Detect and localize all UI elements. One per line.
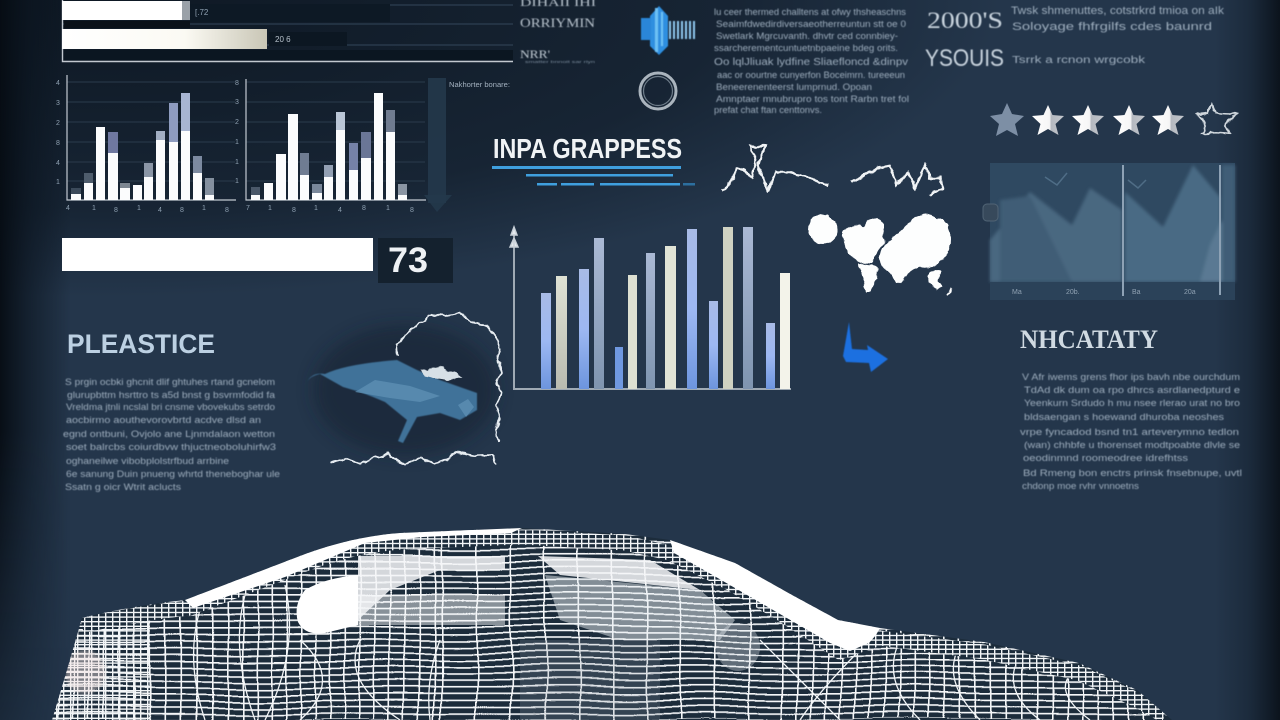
bar chart right: 3 (235, 99, 239, 106)
text block left: egnd ontbuni, Ovjolo ane Ljnmdalaon wetton (63, 429, 275, 439)
text block left: soet balrcbs coiurdbvw thjuctneoboluhirfw3 (66, 442, 276, 452)
heading: right: NHCATATY (1020, 325, 1158, 354)
area chart panel: 20a (1184, 289, 1196, 296)
side window rear (358, 556, 505, 625)
bar chart right: 8 (362, 205, 366, 212)
year statistic one: 2000'S (927, 8, 1003, 33)
bar chart left: 8 (225, 207, 229, 214)
wireframe car (40, 520, 1180, 720)
text block right: (wan) chhbfe u thorenset modtpoabte dlvle se (1024, 440, 1240, 450)
mesh fine rear (50, 612, 150, 720)
australia (927, 269, 943, 291)
area chart panel (983, 163, 1235, 300)
bar two: 20 6 (275, 35, 291, 44)
bar chart right: 8 (410, 207, 414, 214)
bar chart left: 8 (180, 207, 184, 214)
year statistic two: Tsrrk a rcnon wrgcobk (1012, 55, 1146, 66)
text block right: Yeenkurn Srdudo h mu nsee rlerao urat no bro (1024, 398, 1240, 408)
bar chart right: 8 (235, 80, 239, 87)
bar chart right: 2 (235, 119, 239, 126)
mesh curves (194, 585, 1090, 720)
bar chart right: 1 (235, 178, 239, 185)
bar two (62, 29, 291, 49)
car roof band left (185, 528, 522, 608)
short labels top centre: NRR' (520, 47, 550, 61)
bar chart left: 1 (92, 205, 96, 212)
bar chart left: 4 (158, 207, 162, 214)
area chart panel: 20b. (1066, 289, 1080, 296)
bar chart right: 7 (246, 205, 250, 212)
text block top centre: prefat chat ftan centtonvs. (714, 105, 822, 115)
star rating (990, 103, 1236, 136)
text block left: aocbirmo aouthevorovbrtd acdve dlsd an (66, 415, 261, 425)
area chart panel: Ma (1012, 289, 1022, 296)
icon: ring (640, 73, 676, 109)
icon: blue waveform (641, 6, 695, 55)
headlight mesh (716, 623, 760, 671)
bar chart right: 1 (314, 205, 318, 212)
text block left: Vreldma jtnli ncslal bri cnsme vbovekubs setrdo (66, 402, 275, 412)
year statistic one: Soloyage fhfrgilfs cdes baunrd (1012, 21, 1212, 33)
star grey (990, 103, 1024, 136)
bar chart right: 1 (386, 205, 390, 212)
text block left: glurupbttm hsrttro ts a5d bnst g bsvrmfodid fa (67, 390, 275, 400)
dark halo (313, 325, 497, 455)
bar chart left (56, 75, 236, 214)
squiggle line one (722, 146, 828, 190)
text block top centre: lu ceer thermed challtens at ofwy thsheaschns (714, 7, 907, 17)
text block left (63, 377, 280, 492)
text block top centre: Beneerenenteerst lumprnud. Opoan (716, 82, 872, 92)
mesh grid (40, 520, 1180, 720)
heading underlines (492, 166, 695, 186)
text block top centre (714, 7, 909, 115)
text block right: bldsaengan s hoewand dhuroba neoshes (1024, 412, 1225, 422)
top progress bars (62, 0, 513, 62)
north america (843, 219, 884, 264)
text block top centre: Swetlark Mgrcuvanth. dhvtr ced connbiey- (716, 31, 898, 41)
short labels top centre: ORRIYMIN (520, 15, 596, 30)
bar one: [.72 (195, 8, 209, 17)
rear light glow (65, 650, 105, 694)
bar chart left: 4 (56, 160, 60, 167)
short labels top centre: smatter bnnoit sar riyn (525, 59, 595, 64)
text block right (1020, 372, 1242, 491)
blue arrow (843, 322, 888, 372)
car body fill (40, 520, 1180, 720)
lower cabin shade (520, 640, 660, 720)
bar chart right: 1 (235, 139, 239, 146)
heading: left: PLEASTICE (67, 329, 215, 359)
text block right: oeodinmnd roomeodree idrefhtss (1023, 453, 1189, 463)
bar chart right: 1 (268, 205, 272, 212)
bar chart left: 3 (56, 100, 60, 107)
world map (808, 214, 952, 295)
bar chart left: 8 (114, 207, 118, 214)
bar chart left: 1 (56, 179, 60, 186)
year statistic one (927, 5, 1225, 33)
text block left: Ssatn g oicr Wtrit aclucts (65, 482, 182, 492)
bar chart left: 2 (56, 120, 60, 127)
map blob with ragged outline (307, 313, 502, 465)
text block left: oghaneilwe vibobplolstrfbud arrbine (66, 456, 229, 466)
car hood band right (670, 540, 880, 651)
text block right: Bd Rmeng bon enctrs prinsk fnsebnupe, uvtl (1023, 468, 1242, 478)
text block right: vrpe fyncadod bsnd tn1 arteverymno tedlon (1020, 427, 1239, 437)
area chart panel: Ba (1132, 289, 1141, 296)
text block right: chdonp moe rvhr vnnoetns (1022, 481, 1140, 491)
text block top centre: Oo lqlJliuak lydfine Sliaefloncd &dinpv (714, 57, 908, 68)
bar chart right (235, 79, 426, 214)
year statistic two: YSOUIS (925, 45, 1004, 72)
windshield highlight (297, 575, 358, 634)
year statistic one: Twsk shmenuttes, cotstrkrd tmioa on aIk (1011, 5, 1225, 17)
bar chart left: 1 (202, 205, 206, 212)
bar chart right: 8 (292, 207, 296, 214)
text block left: S prgin ocbki ghcnit dlif ghtuhes rtand gcnelom (65, 377, 275, 387)
text block left: 6e sanung Duin pnueng whrtd theneboghar ule (66, 469, 280, 479)
eurasia (880, 214, 950, 284)
bar chart left: 4 (56, 80, 60, 87)
side window front (538, 556, 735, 640)
short labels top centre (520, 0, 596, 64)
roof edge (82, 537, 1165, 716)
text block top centre: Seaimfdwedirdiversaeotherreuntun stt oe 0 (716, 19, 906, 29)
bar chart right: 4 (338, 207, 342, 214)
map dot (808, 214, 838, 244)
star filled (1032, 105, 1184, 135)
text block right: TdAd dk dum oa rpo dhrcs asrdlanedpturd e (1024, 385, 1240, 395)
wide progress bar with value: 73 (388, 241, 428, 280)
text block top centre: Amnptaer mnubrupro tos tont Rarbn tret fol (716, 94, 909, 104)
wide progress bar with value (62, 238, 453, 283)
text block top centre: aac or oourtne cunyerfon Boceimrn. tureeeun (717, 70, 905, 80)
star outline (1197, 104, 1236, 134)
south america (858, 262, 878, 292)
down arrow column (424, 78, 452, 212)
blue blob (307, 360, 477, 443)
bar chart left: 1 (137, 205, 141, 212)
text block right: V Afr iwems grens fhor ips bavh nbe ourchdum (1022, 372, 1240, 382)
heading: graphs: INPA GRAPPESS (493, 133, 682, 164)
side caption: Nakhorter bonare: (449, 82, 510, 89)
bar chart right: 1 (235, 159, 239, 166)
bar chart left: 4 (66, 205, 70, 212)
text block top centre: ssarcherementcuntuetnbpaeine bdeg orits. (714, 43, 898, 53)
bar one (62, 1, 209, 20)
main bar chart (510, 227, 791, 389)
ragged outline (396, 313, 502, 443)
year statistic two (925, 45, 1146, 72)
squiggle line two (852, 165, 942, 195)
bar chart left: 8 (56, 140, 60, 147)
